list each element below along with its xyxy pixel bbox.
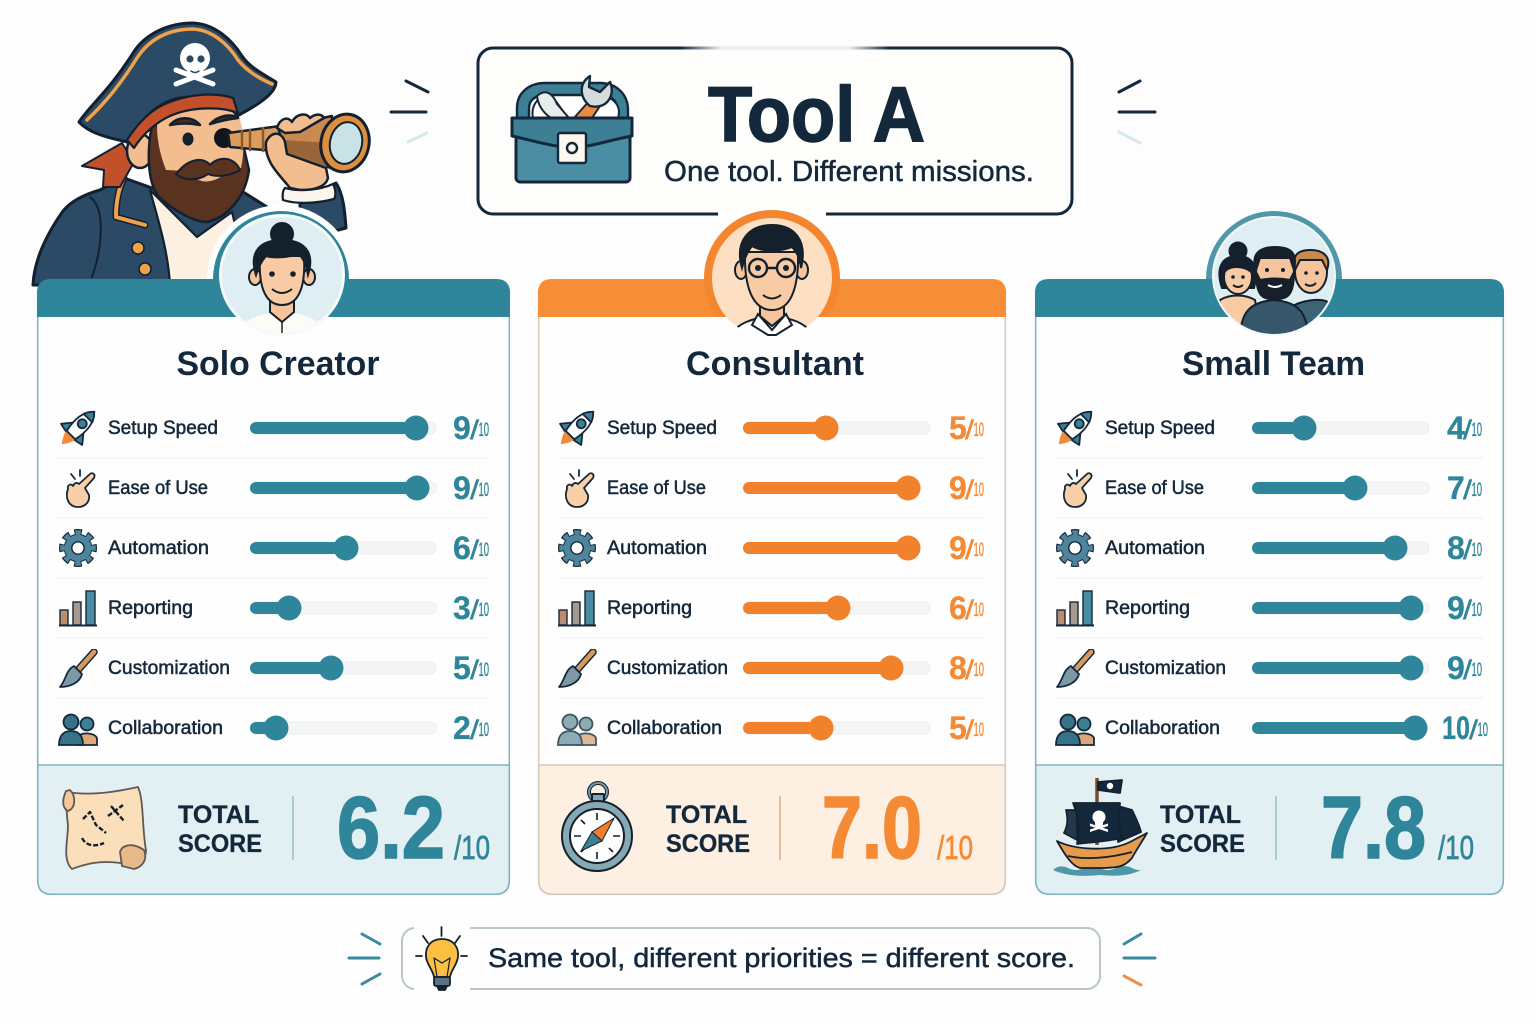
- icon: people: [1056, 714, 1094, 745]
- row: Customization: [60, 650, 489, 687]
- score: [949, 410, 984, 446]
- row: Customization: [559, 650, 984, 687]
- avatar: solo creator: [207, 206, 349, 336]
- card body: [539, 290, 1005, 894]
- avatar: small team: [1206, 211, 1342, 340]
- panel: Small Team: 10: [1478, 720, 1488, 741]
- pirate buttons: [132, 242, 151, 275]
- row: Setup Speed: [1048, 401, 1482, 455]
- score: [949, 650, 984, 686]
- total label: [1160, 801, 1245, 858]
- panel: Small Team: 10: [1472, 540, 1482, 561]
- panel: Small Team: [1035, 211, 1504, 894]
- total value: 6.2: [337, 778, 445, 877]
- row: Automation: [63, 530, 489, 566]
- slider: 8 of 10: [1252, 536, 1429, 560]
- icon: bar chart: [59, 591, 97, 626]
- score: [1447, 410, 1482, 446]
- title text: Tool A: [708, 70, 925, 158]
- panel: Small Team: 10: [1472, 600, 1482, 621]
- pirate shirt: [150, 190, 250, 285]
- card header: [538, 279, 1006, 317]
- label: Ease of Use: [607, 478, 706, 499]
- pirate hand: [266, 115, 328, 190]
- icon: rocket: [51, 401, 105, 455]
- score: /: [965, 535, 975, 565]
- row: Automation: [1060, 530, 1482, 566]
- panel: Consultant: 10: [974, 660, 984, 681]
- panel: Consultant: 10: [974, 420, 984, 441]
- score: /: [470, 475, 480, 505]
- panel: Solo Creator: 10: [478, 720, 489, 741]
- skull and crossbones: [176, 43, 213, 84]
- score: [1447, 590, 1482, 626]
- slider: 9 of 10: [250, 416, 436, 440]
- icon: tapping hand: [67, 470, 95, 507]
- score: [1447, 650, 1482, 686]
- row: Reporting: [59, 590, 489, 626]
- label: Reporting: [108, 598, 193, 619]
- score: [949, 470, 984, 506]
- score: /: [470, 535, 480, 565]
- score: /: [965, 595, 975, 625]
- label: Collaboration: [108, 718, 223, 739]
- score: 5: [949, 710, 967, 746]
- total value: /10: [1438, 829, 1474, 866]
- label: Automation: [1105, 538, 1205, 559]
- pirate face: [157, 108, 243, 172]
- score: /: [1463, 595, 1473, 625]
- label: Collaboration: [607, 718, 722, 739]
- icon: compass: [562, 783, 632, 871]
- score: /: [470, 655, 480, 685]
- score: /: [470, 715, 480, 745]
- spyglass: [214, 110, 375, 176]
- row: Collaboration: [59, 710, 489, 746]
- row: Ease of Use: [67, 470, 489, 507]
- pirate ear: [127, 134, 153, 168]
- label: Setup Speed: [607, 418, 717, 439]
- label: Collaboration: [1105, 718, 1220, 739]
- panel: Small Team: 10: [1472, 480, 1482, 501]
- score: [1447, 470, 1482, 506]
- score: 4: [1447, 410, 1465, 446]
- slider: 5 of 10: [743, 416, 930, 440]
- row: Collaboration: [1056, 710, 1488, 746]
- pirate bandana: [127, 95, 238, 148]
- score: [949, 590, 984, 626]
- pirate jacket: [33, 178, 290, 290]
- slider: 10 of 10: [1252, 716, 1428, 740]
- score: [453, 470, 489, 506]
- slider: 4 of 10: [1252, 416, 1429, 440]
- callout text: Same tool, different priorities = different score.: [488, 943, 1075, 973]
- total label: TOTAL: [1160, 801, 1241, 829]
- pirate cuff: [283, 184, 335, 203]
- accent rays: title left: [391, 81, 428, 142]
- slider: 5 of 10: [743, 716, 930, 740]
- pirate hat trim: [87, 29, 272, 120]
- slider: 9 of 10: [743, 536, 920, 560]
- row: Setup Speed: [550, 401, 984, 455]
- score: /: [1463, 415, 1473, 445]
- score: 5: [453, 650, 471, 686]
- slider: 3 of 10: [250, 596, 436, 620]
- pirate lower lip: [195, 170, 222, 182]
- total score band: [38, 765, 509, 894]
- score: /: [1463, 475, 1473, 505]
- card header: [1035, 279, 1504, 317]
- icon: rocket: [550, 401, 604, 455]
- panel: Consultant: 10: [974, 600, 984, 621]
- icon: bar chart: [558, 591, 596, 626]
- total value: 7.0: [822, 778, 922, 877]
- card title: Consultant: [686, 345, 864, 383]
- total label: TOTAL: [666, 801, 747, 829]
- score: [453, 590, 489, 626]
- icon: treasure map: [63, 787, 146, 869]
- slider: 9 of 10: [743, 476, 920, 500]
- label: Automation: [108, 538, 209, 559]
- score: /: [470, 595, 480, 625]
- icon: paintbrush: [1057, 652, 1091, 687]
- score: /: [1463, 655, 1473, 685]
- score: [949, 710, 984, 746]
- avatar: consultant: [704, 210, 840, 340]
- label: Customization: [108, 658, 230, 679]
- score: 10: [1442, 710, 1470, 746]
- panel: Solo Creator: 10: [478, 600, 489, 621]
- score: /: [965, 475, 975, 505]
- score: 6: [949, 590, 967, 626]
- pirate lapel: [116, 178, 145, 225]
- score: [1447, 530, 1482, 566]
- label: Customization: [1105, 658, 1226, 679]
- icon: gear: [562, 533, 592, 563]
- total value: 7.8: [1321, 778, 1426, 877]
- panel: Consultant: [538, 210, 1006, 894]
- score: [453, 410, 489, 446]
- icon: pirate ship: [1053, 778, 1147, 876]
- pirate brows and eye: [170, 116, 238, 125]
- pirate beard: [149, 125, 249, 222]
- icon: gear: [1060, 533, 1090, 563]
- icon: paintbrush: [60, 652, 94, 687]
- score: /: [1463, 535, 1473, 565]
- panel: Solo Creator: 10: [478, 480, 489, 501]
- score: 8: [1447, 530, 1465, 566]
- pirate arm seam: [90, 197, 101, 277]
- pirate bandana tail: [82, 143, 134, 187]
- row: Reporting: [1056, 590, 1482, 626]
- card body: [38, 290, 509, 894]
- pirate hat: [79, 23, 276, 142]
- label: Customization: [607, 658, 728, 679]
- total score band: [1036, 765, 1503, 894]
- score: /: [965, 655, 975, 685]
- icon: tapping hand: [566, 470, 594, 507]
- label: Reporting: [1105, 598, 1190, 619]
- score: 6: [453, 530, 471, 566]
- score: 9: [949, 470, 967, 506]
- panel: Small Team: 10: [1472, 660, 1482, 681]
- row: Collaboration: [558, 710, 984, 746]
- slider: 5 of 10: [250, 656, 436, 680]
- total label: TOTAL: [178, 801, 259, 829]
- label: Ease of Use: [1105, 478, 1204, 499]
- score: 8: [949, 650, 967, 686]
- accent rays: callout right: [1124, 934, 1155, 985]
- panel: Consultant: 10: [974, 480, 984, 501]
- slider: 8 of 10: [743, 656, 930, 680]
- card body: [1036, 290, 1503, 894]
- slider: 7 of 10: [1252, 476, 1429, 500]
- label: Automation: [607, 538, 707, 559]
- icon: toolbox: [512, 76, 632, 182]
- score: 9: [1447, 650, 1465, 686]
- icon: people: [558, 714, 596, 745]
- total label: [178, 801, 262, 858]
- score: [453, 710, 489, 746]
- score: 9: [949, 530, 967, 566]
- score: 7: [1447, 470, 1465, 506]
- card title: Small Team: [1182, 345, 1365, 383]
- card title: Solo Creator: [176, 345, 380, 383]
- label: Ease of Use: [108, 478, 208, 499]
- slider: 2 of 10: [250, 716, 436, 740]
- total score band: [539, 765, 1005, 894]
- score: [949, 530, 984, 566]
- pirate mascot with spyglass: [33, 23, 375, 290]
- subtitle: One tool. Different missions.: [664, 156, 1034, 188]
- icon: people: [59, 714, 97, 745]
- label: Setup Speed: [108, 418, 218, 439]
- icon: light bulb: [416, 927, 467, 990]
- row: Customization: [1057, 650, 1482, 687]
- panel: Solo Creator: 10: [478, 540, 489, 561]
- icon: paintbrush: [559, 652, 593, 687]
- accent rays: title right: [1119, 81, 1155, 143]
- score: /: [965, 715, 975, 745]
- callout: key takeaway: [402, 925, 1100, 992]
- score: /: [470, 415, 480, 445]
- score: 9: [453, 470, 471, 506]
- total value: /10: [454, 829, 490, 866]
- score: [453, 530, 489, 566]
- score: 5: [949, 410, 967, 446]
- total label: SCORE: [178, 830, 262, 858]
- panel: Solo Creator: 10: [478, 420, 489, 441]
- panel: Solo Creator: [37, 205, 510, 894]
- row: Setup Speed: [51, 401, 489, 455]
- icon: bar chart: [1056, 591, 1094, 626]
- title box: [478, 46, 1072, 218]
- score: 9: [453, 410, 471, 446]
- score: 2: [453, 710, 471, 746]
- row: Ease of Use: [1064, 470, 1482, 507]
- pirate sleeve: [300, 183, 346, 240]
- total label: SCORE: [1160, 830, 1245, 858]
- accent rays: callout left: [349, 934, 380, 984]
- icon: gear: [63, 533, 93, 563]
- icon: rocket: [1048, 401, 1102, 455]
- label: Setup Speed: [1105, 418, 1215, 439]
- row: Ease of Use: [566, 470, 984, 507]
- slider: 6 of 10: [743, 596, 930, 620]
- panel: Small Team: 10: [1472, 420, 1482, 441]
- score: [453, 650, 489, 686]
- label: Reporting: [607, 598, 692, 619]
- slider: 9 of 10: [250, 476, 436, 500]
- pirate moustache: [176, 159, 240, 179]
- slider: 9 of 10: [1252, 656, 1429, 680]
- panel: Solo Creator: 10: [478, 660, 489, 681]
- score: /: [965, 415, 975, 445]
- slider: 9 of 10: [1252, 596, 1429, 620]
- score: /: [1469, 715, 1479, 745]
- total label: SCORE: [666, 830, 750, 858]
- slider: 6 of 10: [250, 536, 436, 560]
- panel: Consultant: 10: [974, 720, 984, 741]
- icon: tapping hand: [1064, 470, 1092, 507]
- total value: /10: [937, 829, 973, 866]
- row: Automation: [562, 530, 984, 566]
- total label: [666, 801, 750, 858]
- card header: [37, 279, 510, 317]
- row: Reporting: [558, 590, 984, 626]
- panel: Consultant: 10: [974, 540, 984, 561]
- score: 3: [453, 590, 471, 626]
- score: 9: [1447, 590, 1465, 626]
